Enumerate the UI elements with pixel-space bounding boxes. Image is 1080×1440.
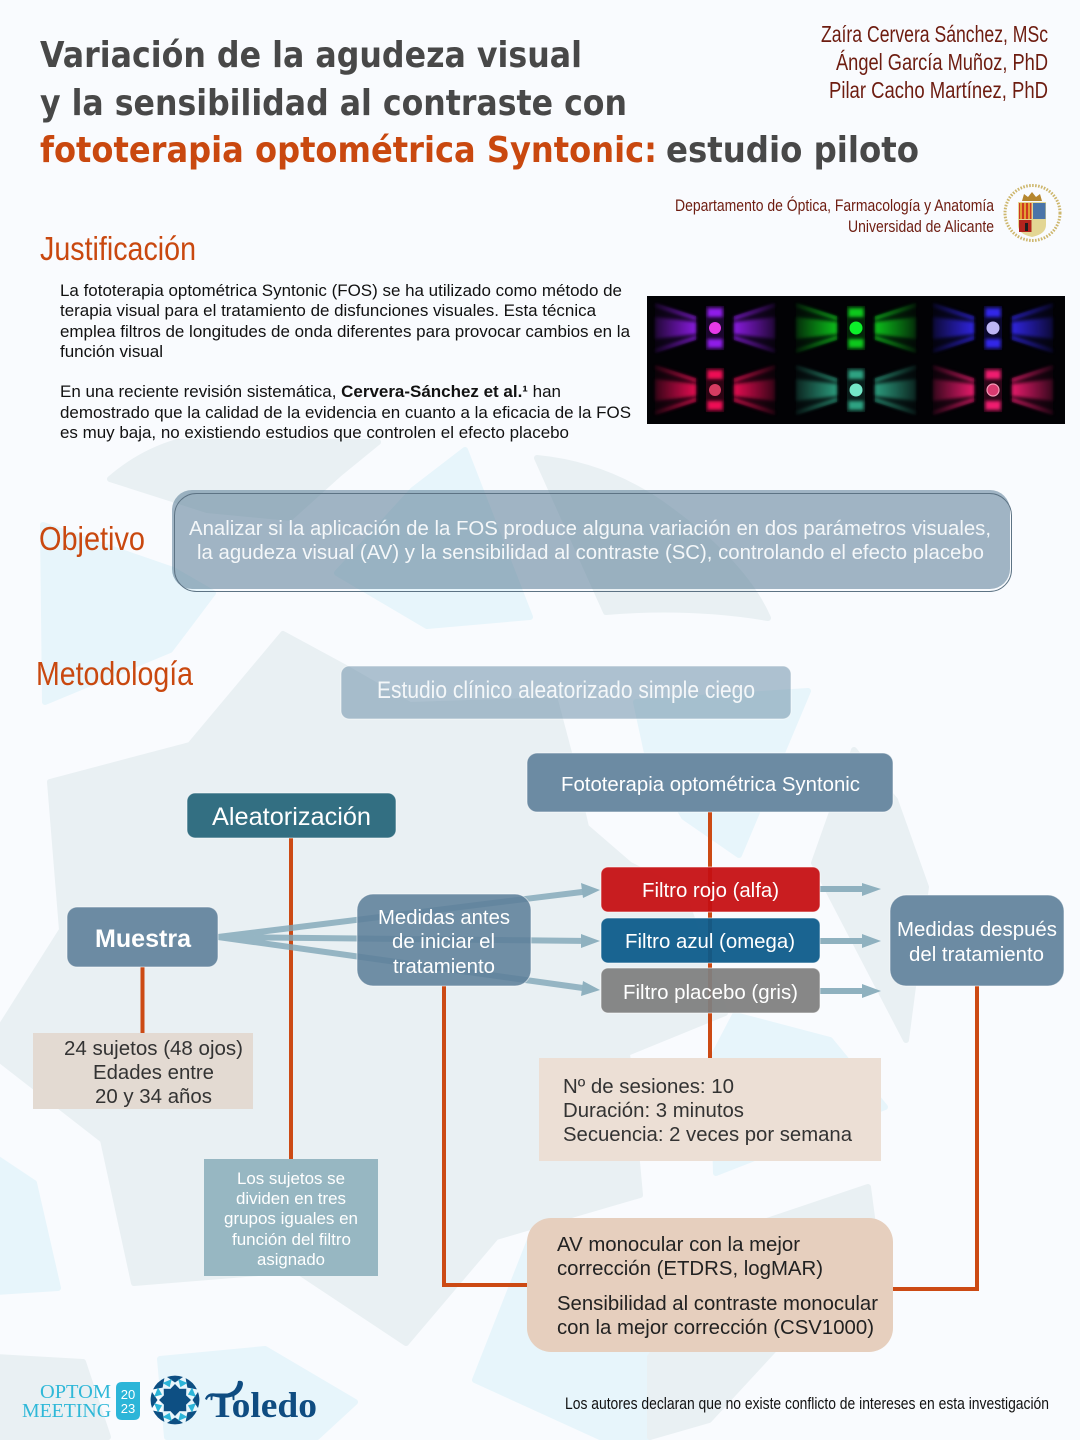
box: Fototerapia optométrica Syntonic	[527, 753, 893, 812]
box: Medidas antes: Medidas antes	[378, 907, 510, 929]
logo: Optom Meeting 2023: OPTOM	[40, 1381, 111, 1403]
box: sample details	[33, 1033, 253, 1109]
title: fototerapia optométrica Syntonic:	[40, 130, 657, 171]
box: sample details: 20 y 34 años	[95, 1086, 212, 1108]
title: estudio piloto	[666, 130, 919, 171]
box: Medidas después: Medidas después	[897, 919, 1057, 941]
box: Medidas antes	[357, 894, 531, 986]
box: Medidas después	[890, 895, 1064, 986]
box: randomisation details: grupos iguales en	[224, 1209, 358, 1228]
box: session details: Nº de sesiones: 10	[563, 1076, 734, 1098]
image: coloured light patterns	[647, 296, 1065, 424]
title: Variación de la agudeza visual	[40, 35, 582, 76]
box: Filtro rojo	[601, 867, 820, 912]
logo: Optom Meeting 2023: MEETING	[22, 1400, 111, 1422]
box: sample details: Edades entre	[93, 1062, 214, 1084]
box: Aleatorización	[187, 793, 396, 838]
arrows: sample to filters	[218, 883, 600, 996]
affiliation: Universidad de Alicante	[848, 217, 994, 236]
text block: justificación	[60, 282, 631, 442]
panel: objetivo: Analizar si la aplicación de la FOS produce alguna variación en dos parámetros visuales,	[189, 517, 991, 540]
box: outcome measures: Sensibilidad al contraste monocular	[557, 1293, 878, 1315]
box: Filtro azul: Filtro azul (omega)	[625, 931, 795, 953]
box: sample details: 24 sujetos (48 ojos)	[64, 1038, 243, 1060]
box: outcome measures: con la mejor corrección (CSV1000)	[557, 1317, 874, 1339]
box: Medidas antes: tratamiento	[393, 956, 495, 978]
logo: Optom Meeting 2023: 23	[121, 1401, 135, 1416]
box: randomisation details: función del filtro	[232, 1230, 351, 1249]
box: outcome measures: corrección (ETDRS, logMAR)	[557, 1258, 823, 1280]
panel: study type	[341, 666, 791, 719]
box: outcome measures: AV monocular con la mejor	[557, 1234, 800, 1256]
box: Medidas después: del tratamiento	[909, 944, 1044, 966]
panel: study type: Estudio clínico aleatorizado simple ciego	[377, 677, 755, 704]
box: session details	[539, 1058, 881, 1161]
text block: justificación: función visual	[60, 343, 163, 361]
text block: justificación: terapia visual para el tratamiento de disfunciones visuales. Esta técnica	[60, 302, 597, 320]
panel: objetivo	[172, 490, 1012, 592]
box: Filtro rojo: Filtro rojo (alfa)	[642, 880, 779, 902]
affiliation	[675, 196, 994, 236]
text block: justificación: demostrado que la calidad de la evidencia en cuanto a la eficacia de la FOS	[60, 404, 631, 422]
affiliation: Departamento de Óptica, Farmacología y Anatomía	[675, 196, 994, 215]
logo: Optom Meeting 2023: 20	[121, 1387, 135, 1402]
box: Fototerapia optométrica Syntonic: Fototerapia optométrica Syntonic	[561, 773, 860, 796]
connectors: orange lines	[142, 812, 977, 1289]
box: Filtro placebo	[601, 968, 820, 1013]
text block: justificación: emplea filtros de longitudes de onda diferentes para provocar cambios en la	[60, 323, 631, 341]
box: randomisation details: dividen en tres	[236, 1189, 346, 1208]
heading: Justificación: Justificación	[40, 230, 196, 267]
panel: objetivo: la agudeza visual (AV) y la sensibilidad al contraste (SC), controlando el efecto placebo	[197, 541, 984, 564]
box: Medidas antes: de iniciar el	[392, 931, 495, 953]
box: Muestra: Muestra	[95, 925, 192, 953]
box: randomisation details: asignado	[257, 1250, 325, 1269]
authors	[821, 21, 1048, 103]
text block: justificación: La fototerapia optométrica Syntonic (FOS) se ha utilizado como método de	[60, 282, 622, 300]
heading: Objetivo: Objetivo	[39, 520, 145, 557]
icon: university seal	[1005, 186, 1060, 240]
box: Filtro placebo: Filtro placebo (gris)	[623, 982, 798, 1004]
box: randomisation details: Los sujetos se	[237, 1169, 345, 1188]
logo: Toledo emblem	[151, 1376, 199, 1424]
arrows: filters to measurements	[820, 883, 881, 998]
box: session details: Duración: 3 minutos	[563, 1100, 744, 1122]
box: session details: Secuencia: 2 veces por semana	[563, 1124, 853, 1146]
text block: justificación: es muy baja, no existiendo estudios que controlen el efecto placebo	[60, 424, 569, 442]
logo: Optom Meeting 2023	[22, 1381, 140, 1422]
title	[40, 35, 919, 171]
heading: Metodología: Metodología	[36, 655, 194, 692]
box: Filtro azul	[601, 918, 820, 963]
box: Muestra	[67, 907, 218, 967]
box: randomisation details	[204, 1159, 378, 1276]
box: Aleatorización: Aleatorización	[212, 803, 371, 831]
box: outcome measures	[527, 1218, 893, 1352]
text block: justificación: En una reciente revisión sistemática, Cervera-Sánchez et al.¹ han	[60, 383, 561, 401]
title: y la sensibilidad al contraste con	[40, 83, 627, 124]
logo: Toledo wordmark: Toledo	[210, 1385, 317, 1425]
